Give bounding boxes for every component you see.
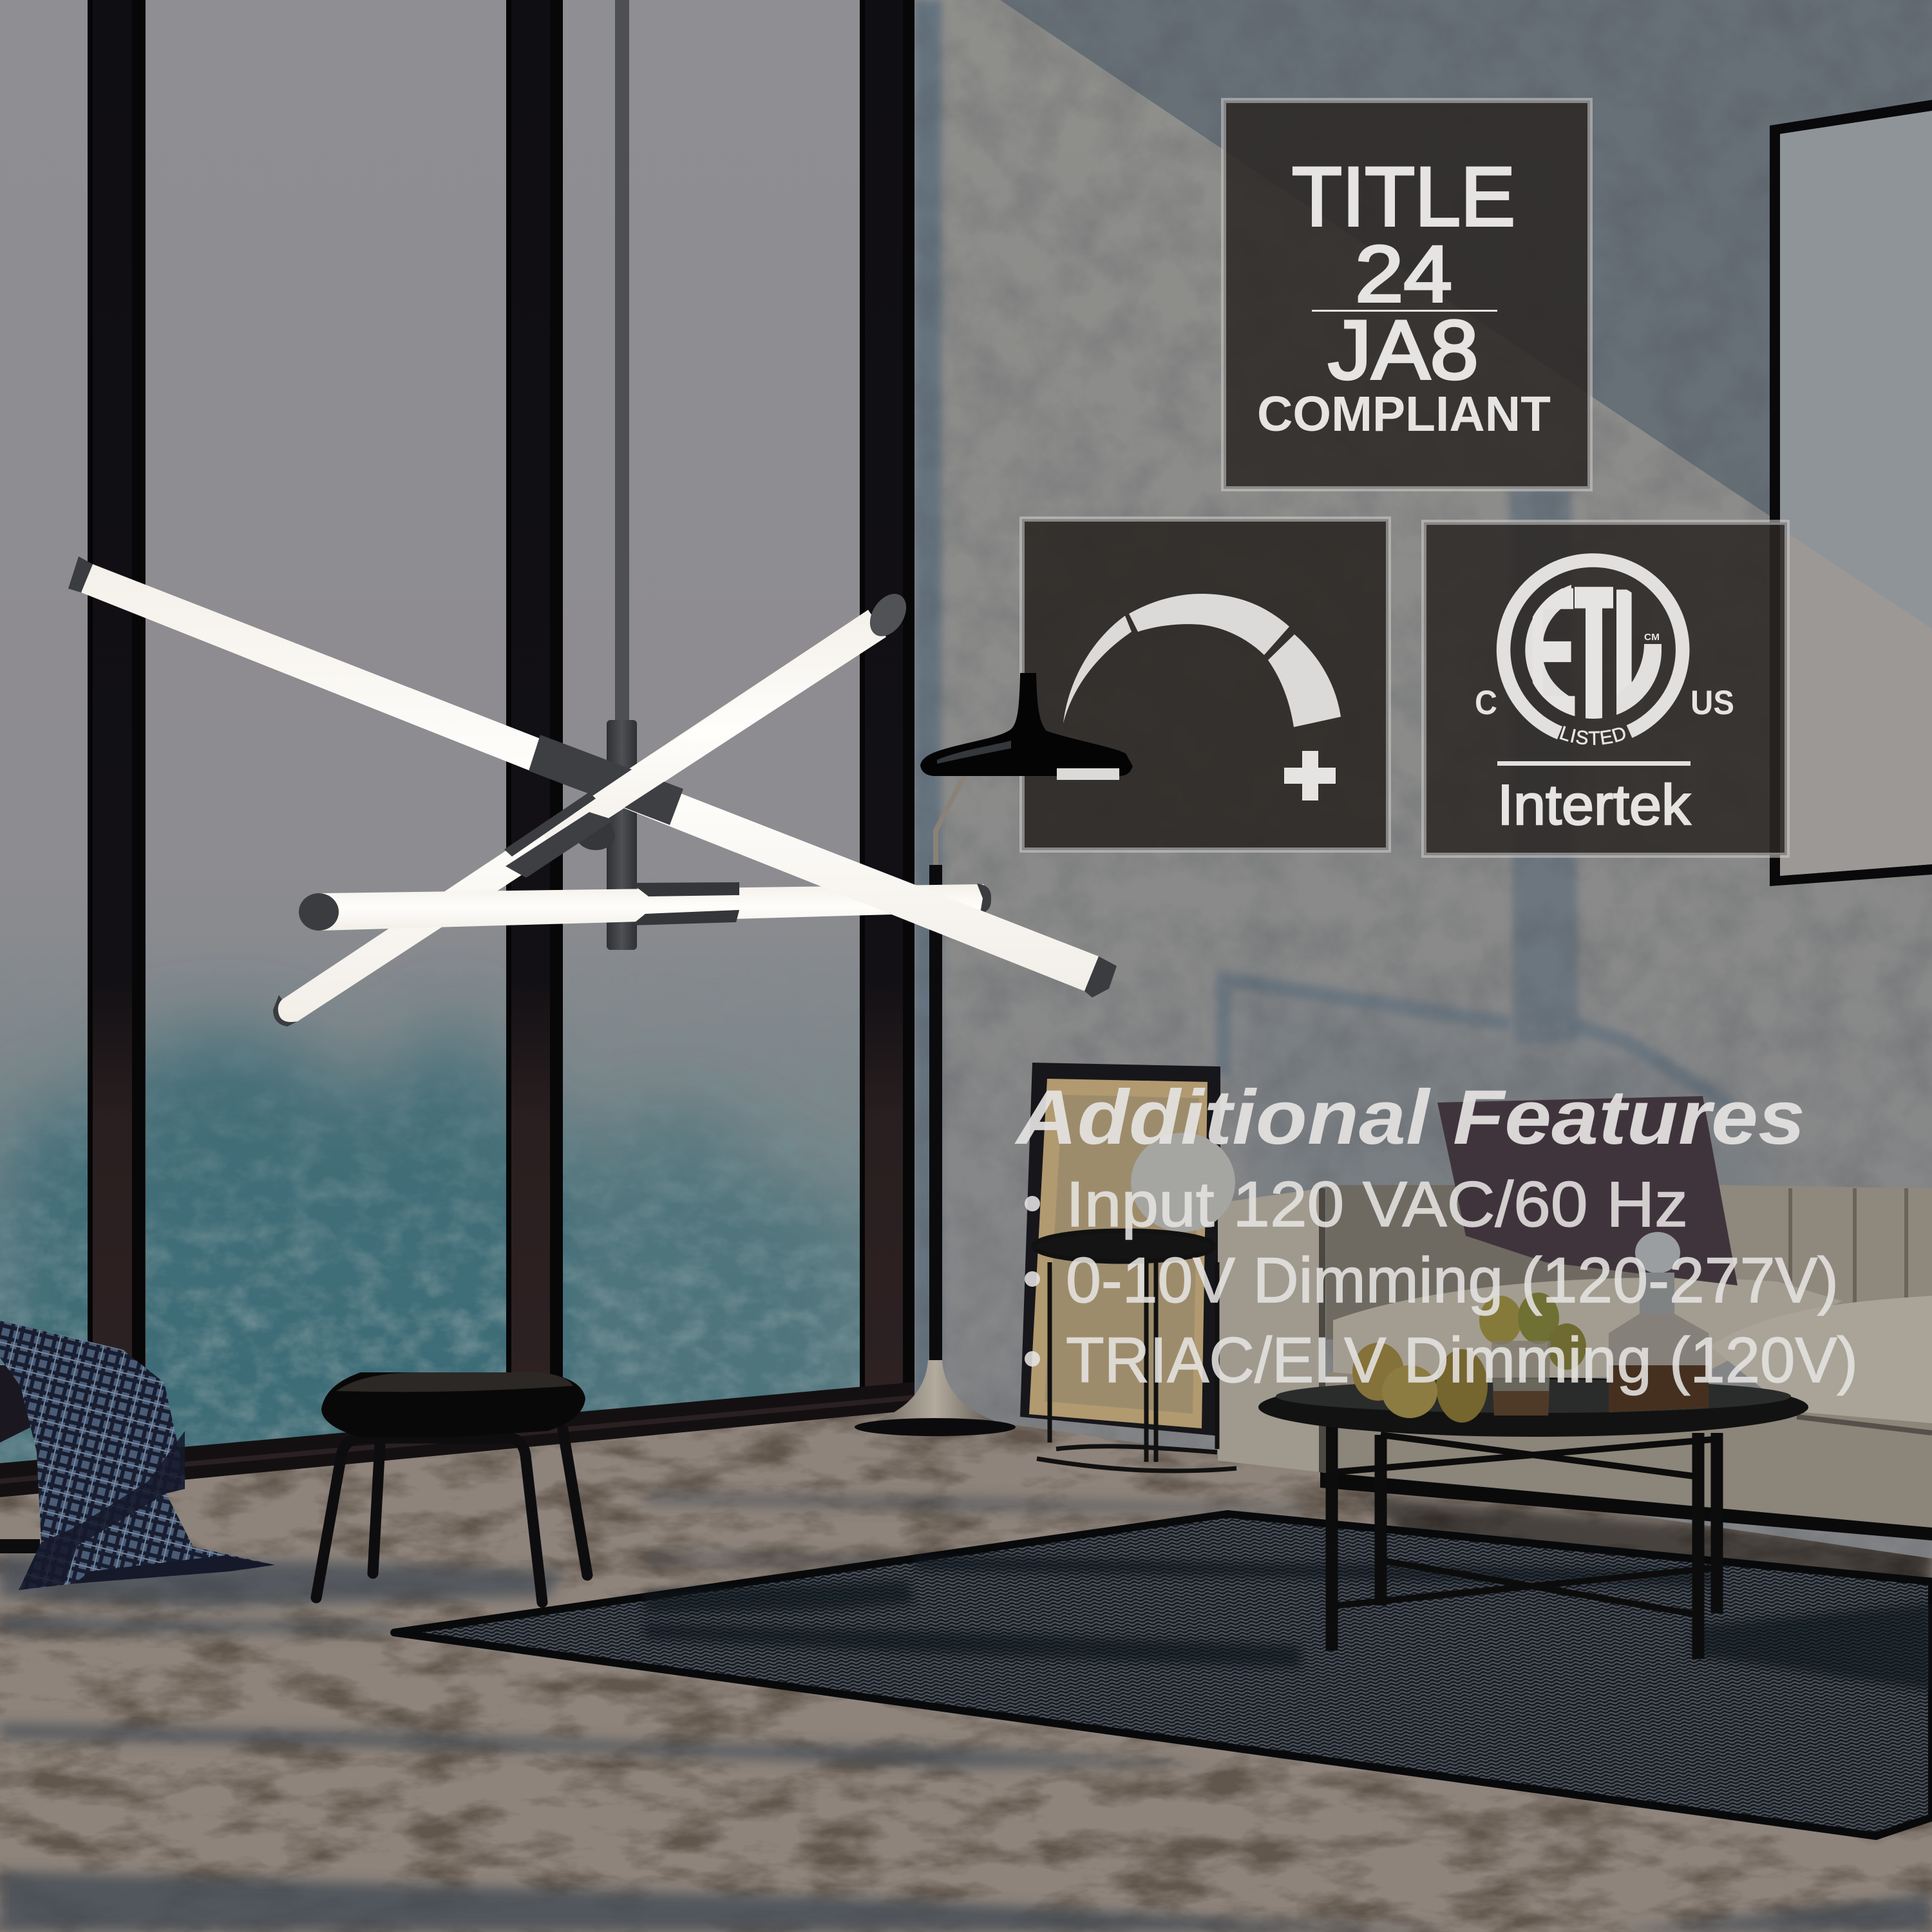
sofa — [1218, 1185, 1932, 1540]
bar: upper left to lower right — [68, 556, 1117, 998]
compliant: COMPLIANT — [1257, 386, 1551, 442]
feature: input voltage: Input 120 VAC/60 Hz — [1066, 1168, 1688, 1240]
plaid blanket and bench — [0, 1321, 275, 1590]
background: window view with foggy forest — [0, 0, 914, 1507]
panel: dimming background — [1022, 519, 1388, 850]
icon: ETL mark: LISTED — [1560, 726, 1625, 745]
stool — [316, 1372, 587, 1602]
concrete wall — [914, 0, 1932, 1578]
window frames — [0, 0, 914, 1497]
feature list — [1025, 1168, 1858, 1396]
globe table lamp — [1131, 1133, 1235, 1232]
bar: upper section in front — [504, 587, 914, 878]
chandelier — [68, 0, 1117, 1027]
panel: ETL listed — [1421, 520, 1790, 858]
feature: 0-10V dimming: 0-10V Dimming (120-277V) — [1066, 1244, 1839, 1316]
additional features heading: Additional Features — [1014, 1074, 1805, 1160]
dimming gauge — [1057, 594, 1341, 800]
canvas leaning on wall — [1020, 1063, 1220, 1436]
label: US: US — [1690, 684, 1734, 722]
icon: ETL mark — [1497, 553, 1690, 745]
coffee table — [1258, 1232, 1808, 1659]
poster frame on wall — [1770, 100, 1932, 886]
icon: dimming arc — [1063, 594, 1341, 727]
icon: minus — [1057, 768, 1119, 780]
label: C: C — [1475, 684, 1497, 722]
title text: TITLE — [1292, 149, 1515, 243]
icon: ETL mark: CM — [1644, 632, 1660, 643]
stem — [607, 0, 637, 950]
glass cup — [1492, 1341, 1551, 1416]
icon: ETL mark: T — [1558, 545, 1629, 761]
bar: horizontal — [299, 882, 991, 931]
fruit bowl — [1352, 1293, 1586, 1423]
Intertek wordmark: Intertek — [1497, 773, 1691, 837]
icon: ETL mark: E — [1528, 548, 1578, 757]
concrete floor — [0, 1404, 1932, 1932]
floor lamp — [855, 776, 1016, 1436]
side table — [1034, 1231, 1236, 1471]
number 24: 24 — [1355, 230, 1452, 319]
rug — [394, 1514, 1932, 1836]
purple cushion — [1437, 1096, 1738, 1285]
decanter — [1609, 1232, 1709, 1412]
knob connector — [576, 822, 615, 850]
lamp shade over panel — [920, 673, 1133, 776]
JA8: JA8 — [1328, 303, 1479, 397]
bar: lower left to upper right, full length — [273, 610, 886, 1027]
icon: plus — [1284, 751, 1336, 800]
panel: Title 24 JA8 compliant — [1224, 100, 1590, 489]
feature: TRIAC/ELV dimming: TRIAC/ELV Dimming (120V) — [1066, 1324, 1858, 1396]
icon: ETL mark: L — [1608, 549, 1676, 758]
